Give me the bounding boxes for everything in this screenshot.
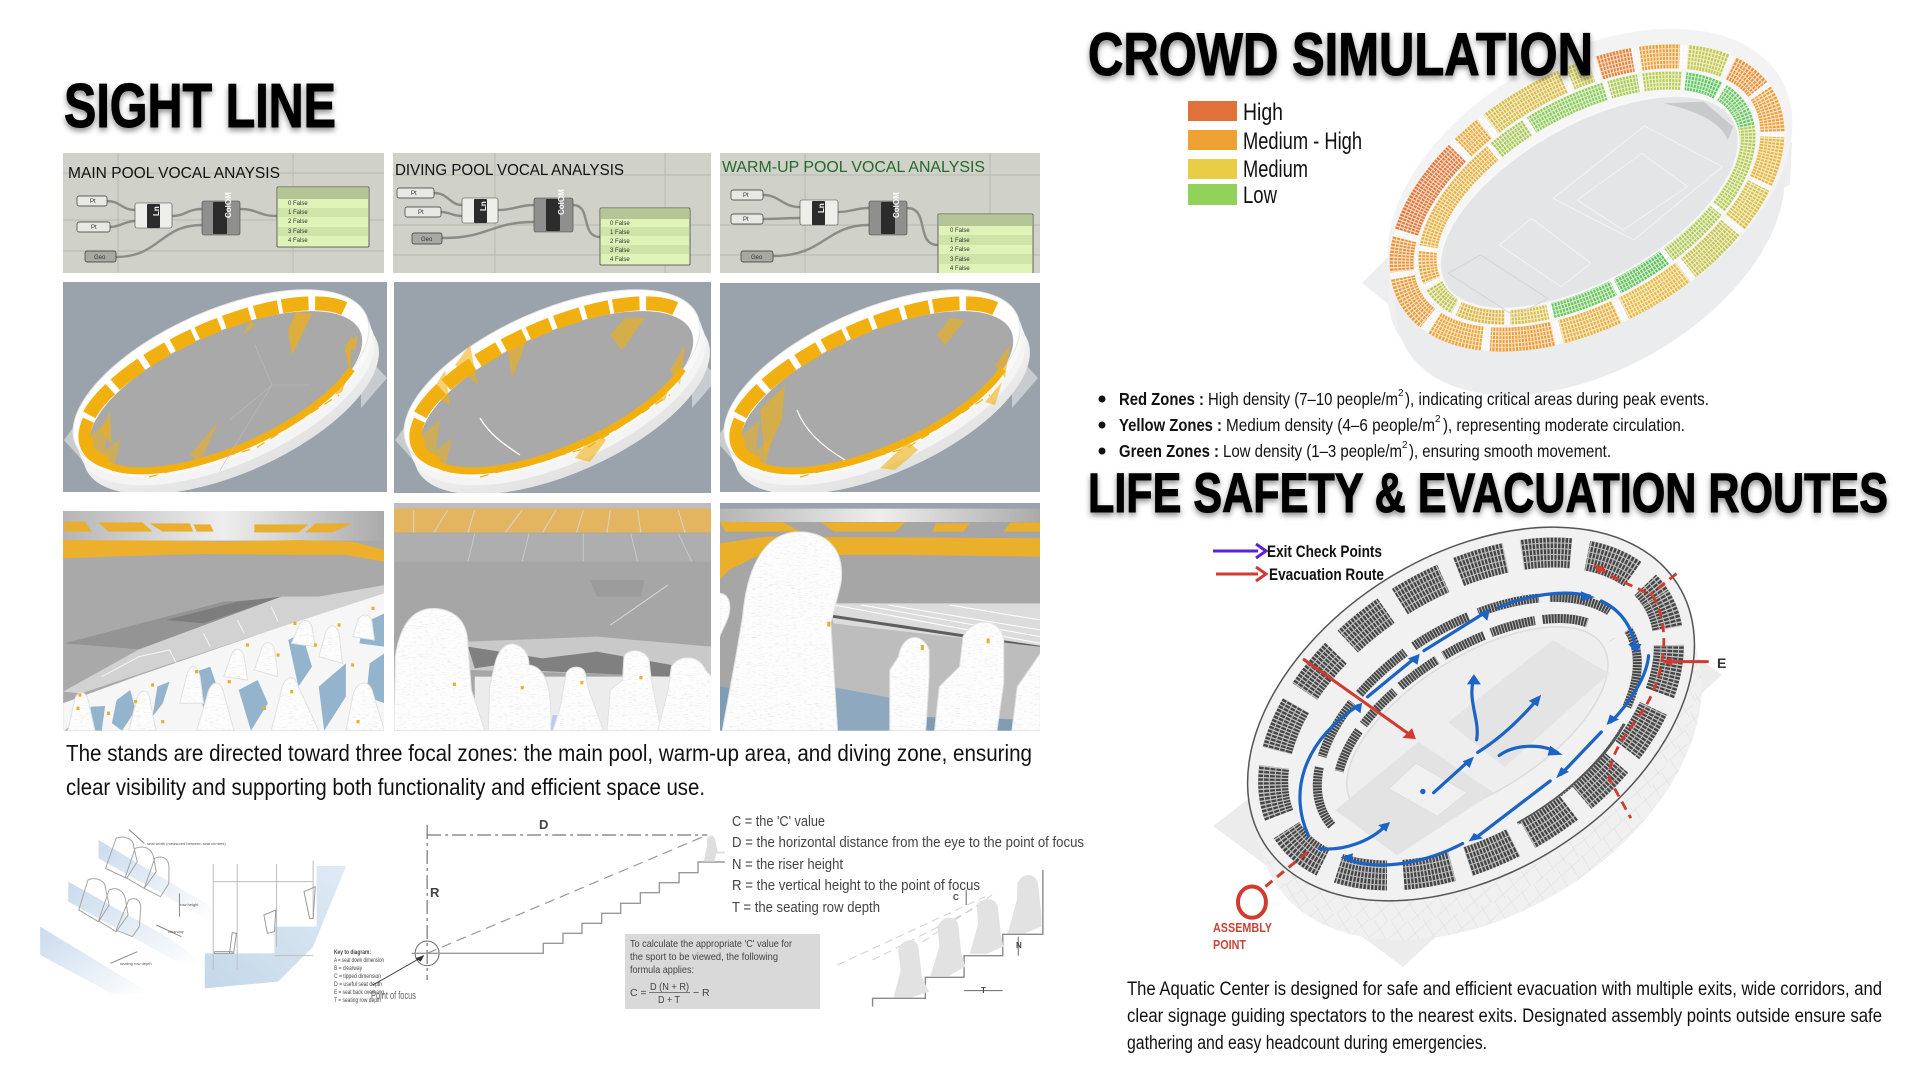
bullet: red zones: Red Zones : xyxy=(1119,389,1204,409)
legend: formula variables: D = the horizontal distance from the eye to the point of focus xyxy=(732,835,1084,851)
inner ring density sectors xyxy=(1389,32,1785,364)
node components: diving pool: Ln xyxy=(479,201,488,211)
spectators rows xyxy=(68,615,385,731)
node components: warm-up pool: Pt xyxy=(743,217,749,223)
bullet: green zones: Green Zones : xyxy=(1119,441,1219,461)
node components: warm-up pool: ColOM xyxy=(892,192,901,218)
orange lower seat tier xyxy=(720,537,1040,580)
bullet: yellow zones xyxy=(1098,414,1685,435)
node components: diving pool: Geo xyxy=(421,237,433,243)
legend item: high: High xyxy=(1243,99,1283,126)
diagram: isometric seating rows: seat width (measured between seat centres) xyxy=(147,841,226,846)
lower concourse xyxy=(832,624,1040,720)
text block: zone descriptions xyxy=(1098,388,1709,461)
legend item: medium-high: Medium - High xyxy=(1243,128,1362,155)
bullet: yellow zones: Medium density (4–6 people/m xyxy=(1226,415,1435,435)
blue circulation arrows xyxy=(1300,591,1649,865)
orange lower seat tier xyxy=(63,540,385,562)
seating bowl xyxy=(1180,450,1762,978)
stepped terraces xyxy=(99,840,211,922)
node components: main pool: ColOM xyxy=(224,192,233,218)
output panel: diving pool: 4 False xyxy=(610,257,630,263)
label: point of focus: Point of focus xyxy=(371,990,416,1002)
output panel: main pool: 0 False xyxy=(288,201,308,207)
legend item: exit check points: Exit Check Points xyxy=(1267,543,1382,561)
panel: crowd simulation stadium xyxy=(1333,0,1847,458)
node components: main pool: Ln xyxy=(152,206,161,216)
node wires: warm-up pool xyxy=(763,195,938,256)
legend item: medium: Medium xyxy=(1243,156,1308,183)
panel: diving pool interior perspective xyxy=(394,503,711,731)
base plate tabs xyxy=(1362,105,1792,388)
diagram: isometric seating rows xyxy=(40,829,226,994)
diagram: isometric seating rows: seating row depth xyxy=(120,961,152,966)
node components: diving pool: ColOM xyxy=(557,189,566,215)
node wires: main pool xyxy=(107,201,277,257)
stadium hull with grid xyxy=(1185,471,1769,1017)
label: main pool vocal analysis: MAIN POOL VOCAL ANAYSIS xyxy=(68,165,280,182)
label R: R xyxy=(430,885,440,900)
label T: T xyxy=(981,986,986,995)
node components: warm-up pool xyxy=(731,190,907,262)
legend: crowd density xyxy=(1188,99,1362,209)
label N: N xyxy=(1016,941,1022,950)
legend: formula variables: C = the 'C' value xyxy=(732,814,825,830)
key to diagram: A = seat down dimension xyxy=(334,958,384,964)
panel: diving pool oval sight-line model xyxy=(394,282,711,493)
callout: C value formula: − R xyxy=(693,987,710,999)
seat texture xyxy=(1202,472,1740,956)
panel: warm-up pool interior perspective xyxy=(720,503,1040,731)
callout: C value formula: C = xyxy=(630,987,647,999)
callout: C value formula: To calculate the appropriate 'C' value for xyxy=(630,938,792,950)
pool basins and routes xyxy=(1238,565,1709,918)
bullet: red zones: High density (7–10 people/m xyxy=(1208,389,1398,409)
description: sight line xyxy=(66,740,1032,800)
node components: main pool xyxy=(77,192,240,262)
output panel: warm-up pool: 0 False xyxy=(950,228,970,234)
output panel: warm-up pool: 3 False xyxy=(950,257,970,263)
bullet: yellow zones: Yellow Zones : xyxy=(1119,415,1222,435)
callout: C value formula: formula applies: xyxy=(630,964,694,976)
bullet: red zones xyxy=(1098,388,1709,409)
seated spectators and blue seats xyxy=(63,593,385,731)
red evacuation routes xyxy=(1238,565,1709,918)
output panel: main pool: 4 False xyxy=(288,238,308,244)
bullet: yellow zones: 2 xyxy=(1435,414,1441,425)
bullet: red zones: 2 xyxy=(1398,388,1404,399)
far white fan xyxy=(831,603,1040,647)
pool surface xyxy=(65,599,274,650)
label D: D xyxy=(539,817,548,832)
thin lower seat row xyxy=(1266,537,1689,911)
description: sight line: The stands are directed toward three focal zones: the main pool, warm-up area, and diving zone, ensuring xyxy=(66,740,1032,766)
pool basins xyxy=(1448,640,1609,767)
label: assembly point: POINT xyxy=(1213,938,1246,952)
diagram: isometric seating rows: row height xyxy=(180,902,199,907)
spectators xyxy=(720,532,1040,731)
node components: diving pool xyxy=(397,188,573,244)
white fence xyxy=(63,585,385,693)
label: assembly point: ASSEMBLY xyxy=(1213,921,1273,935)
base plate xyxy=(1213,560,1722,967)
stadium hull xyxy=(1333,0,1847,458)
legend: formula variables: R = the vertical height to the point of focus xyxy=(732,878,980,894)
output panel: warm-up pool xyxy=(938,214,1034,273)
pool outlines xyxy=(1448,102,1733,317)
output panel: diving pool: 1 False xyxy=(610,230,630,236)
output panel: warm-up pool: 1 False xyxy=(950,238,970,244)
panel: evacuation stadium xyxy=(1180,450,1769,1017)
legend item: high xyxy=(1188,99,1283,126)
diagram: isometric seating rows: clearway xyxy=(168,929,184,934)
label: diving pool vocal analysis: DIVING POOL VOCAL ANALYSIS xyxy=(395,162,624,179)
panel: main pool grasshopper analysis xyxy=(63,153,384,273)
blue seats xyxy=(720,686,730,731)
title: sight line: SIGHT LINE xyxy=(64,72,336,141)
blue seat xyxy=(551,715,558,731)
node components: diving pool: Pt xyxy=(418,210,424,216)
top roof band xyxy=(63,511,385,541)
diagram: riser and point of focus section xyxy=(371,817,725,1002)
description: sight line: clear visibility and supporting both functionality and efficient space use. xyxy=(66,774,705,800)
pool floor xyxy=(1316,588,1639,860)
lower seat rows xyxy=(394,533,711,562)
bullet: yellow zones: ), representing moderate circulation. xyxy=(1443,415,1685,435)
key to diagram: T = seating row depth xyxy=(334,998,381,1004)
key to diagram: Key to diagram: xyxy=(334,950,371,956)
legend: formula variables: T = the seating row depth xyxy=(732,900,880,916)
output panel: diving pool: 3 False xyxy=(610,248,630,254)
panel: warm-up pool oval sight-line model xyxy=(720,283,1040,492)
output panel: main pool xyxy=(277,187,369,247)
bullet: green zones: Low density (1–3 people/m xyxy=(1223,441,1402,461)
sight rays: main pool xyxy=(100,312,358,470)
legend: routes xyxy=(1213,543,1384,584)
outer seat blocks xyxy=(1216,486,1726,942)
bullet: green zones xyxy=(1098,440,1611,461)
seat row texture xyxy=(1343,0,1831,409)
orange upper seat tier xyxy=(720,522,1040,532)
diagram: seated spectators C value section xyxy=(837,870,1043,1007)
node components: main pool: Pt xyxy=(90,199,96,205)
output panel: main pool: 1 False xyxy=(288,210,308,216)
label C: C xyxy=(953,893,959,902)
node components: warm-up pool: Ln xyxy=(817,203,826,213)
panel: warm-up pool grasshopper analysis xyxy=(720,153,1040,284)
legend item: medium xyxy=(1188,156,1308,183)
panel: diving pool grasshopper analysis xyxy=(393,153,711,273)
panel: main pool interior perspective xyxy=(63,511,385,731)
legend item: evacuation route: Evacuation Route xyxy=(1269,566,1384,584)
railing xyxy=(832,615,1040,647)
bullet: red zones: ), indicating critical areas during peak events. xyxy=(1405,389,1709,409)
key to diagram xyxy=(334,950,384,1004)
bullet: green zones: ), ensuring smooth movement. xyxy=(1409,441,1611,461)
legend item: exit check points xyxy=(1213,543,1382,561)
label: warm-up pool vocal analysis: WARM-UP POOL VOCAL ANALYSIS xyxy=(722,159,985,176)
sight rays: diving pool xyxy=(430,318,685,462)
output panel: warm-up pool: 2 False xyxy=(950,247,970,253)
sight line dots xyxy=(78,607,373,723)
key to diagram: C = tipped dimension xyxy=(334,974,381,980)
sight rays: warm-up pool xyxy=(760,318,1010,470)
clipped exit label: E xyxy=(1717,655,1726,671)
callout: C value formula: D (N + R) xyxy=(650,981,689,993)
title: crowd simulation: CROWD SIMULATION xyxy=(1088,21,1593,88)
legend: formula variables xyxy=(732,814,1084,916)
key to diagram: E = seat back overhang xyxy=(334,990,384,996)
output panel: diving pool xyxy=(600,208,690,265)
orange seat band xyxy=(394,508,711,533)
output panel: main pool: 3 False xyxy=(288,229,308,235)
seats xyxy=(79,837,169,937)
description: evacuation xyxy=(1127,979,1882,1054)
pool floor xyxy=(1407,53,1772,352)
node components: warm-up pool: Geo xyxy=(751,255,763,261)
legend item: evacuation route xyxy=(1216,566,1384,584)
legend item: low xyxy=(1188,182,1278,209)
legend item: medium-high xyxy=(1188,128,1362,155)
bullet: green zones: 2 xyxy=(1402,440,1408,451)
node wires: diving pool xyxy=(434,193,600,238)
orange upper seat tier xyxy=(64,522,353,532)
callout: C value formula xyxy=(625,934,820,1009)
label: assembly point xyxy=(1213,921,1273,952)
node components: diving pool: Pt xyxy=(411,191,417,197)
output panel: main pool: 2 False xyxy=(288,219,308,225)
node components: main pool: Geo xyxy=(94,255,106,261)
inner seat blocks xyxy=(1303,576,1652,872)
panel: sight line section xyxy=(40,72,1084,1009)
description: evacuation: gathering and easy headcount during emergencies. xyxy=(1127,1033,1487,1054)
output panel: diving pool: 2 False xyxy=(610,239,630,245)
key to diagram: B = clearway xyxy=(334,966,362,972)
seating bowl xyxy=(1337,0,1837,415)
middle seat blocks xyxy=(1273,545,1681,903)
output panel: diving pool: 0 False xyxy=(610,221,630,227)
far stands fan xyxy=(468,637,711,677)
floor xyxy=(474,676,670,730)
outer ring density sectors xyxy=(1354,0,1820,398)
roof band xyxy=(720,503,1040,509)
callout: C value formula: the sport to be viewed, the following xyxy=(630,951,778,963)
callout: C value formula: D + T xyxy=(658,994,680,1006)
key to diagram: D = useful seat depth xyxy=(334,982,382,988)
legend item: low: Low xyxy=(1243,182,1278,209)
legend: formula variables: N = the riser height xyxy=(732,857,843,873)
panel: main pool oval sight-line model xyxy=(63,282,387,492)
node components: main pool: Pt xyxy=(91,225,97,231)
node components: warm-up pool: Pt xyxy=(743,193,749,199)
roof band xyxy=(394,503,711,508)
spectators xyxy=(394,608,711,731)
output panel: warm-up pool: 4 False xyxy=(950,266,970,272)
diagram: seating section with blue terraces xyxy=(205,861,346,988)
